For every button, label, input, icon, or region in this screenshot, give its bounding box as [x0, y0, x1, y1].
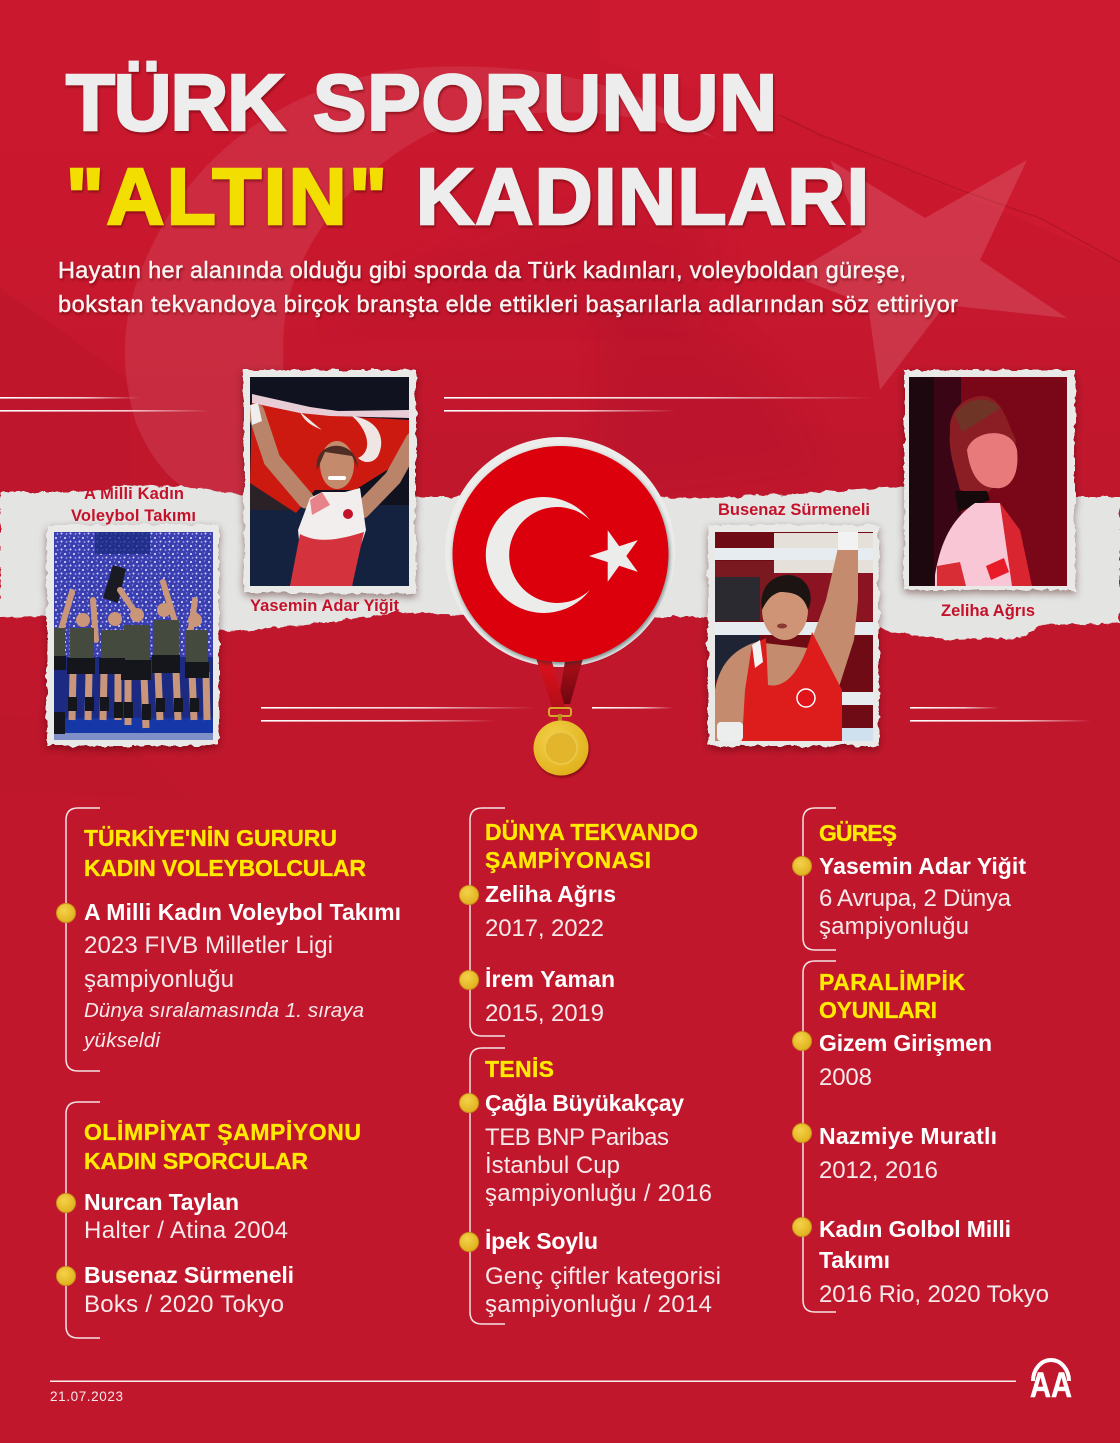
panel: Dünya Tekvando Şampiyonası: ŞAMPİYONASI [485, 847, 651, 873]
panel: Güreş: GÜREŞ [819, 820, 897, 846]
panel: Dünya Tekvando Şampiyonası [460, 808, 698, 1036]
panel: Paralimpik Oyunları: 2012, 2016 [819, 1157, 938, 1184]
panel: Türkiye'nin gururu: A Milli Kadın Voleybol Takımı [84, 899, 401, 925]
captions: Yasemin Adar Yiğit [250, 597, 400, 615]
title: SPORUNUN [313, 58, 777, 147]
panel: Olimpiyat şampiyonu: OLİMPİYAT ŞAMPİYONU [84, 1119, 361, 1145]
footer rule [50, 1380, 1016, 1382]
bullet [792, 1218, 812, 1236]
crescent [486, 497, 590, 613]
subtitle: Hayatın her alanında olduğu gibi sporda da Türk kadınları, voleyboldan güreşe, [58, 257, 906, 283]
panel: Olimpiyat şampiyonu: Busenaz Sürmeneli [84, 1262, 294, 1288]
panel: Paralimpik Oyunları: OYUNLARI [819, 997, 937, 1023]
panel: Türkiye'nin gururu [56, 808, 401, 1071]
title: "ALTIN" [66, 152, 387, 241]
panel: Türkiye'nin gururu: Dünya sıralamasında 1. sıraya [84, 999, 364, 1022]
panel: Tenis: TENİS [485, 1056, 554, 1082]
flag roundel and medal [445, 437, 675, 776]
panel: Olimpiyat şampiyonu: Nurcan Taylan [84, 1189, 239, 1215]
title [66, 58, 869, 241]
panel: Tenis [460, 1048, 721, 1324]
decorative rules [0, 397, 1091, 722]
photo: A Milli Kadın Voleybol Takımı [47, 525, 219, 746]
captions: Zeliha Ağrıs [941, 602, 1035, 620]
panel: Olimpiyat şampiyonu: Halter / Atina 2004 [84, 1217, 288, 1244]
panel: Tenis: şampiyonluğu / 2014 [485, 1291, 712, 1318]
ribbon [535, 655, 584, 710]
panel: Tenis: Çağla Büyükakçay [485, 1090, 684, 1116]
panel: Paralimpik Oyunları: Kadın Golbol Milli [819, 1216, 1011, 1242]
panel: Paralimpik Oyunları: Gizem Girişmen [819, 1030, 992, 1056]
panel: Dünya Tekvando Şampiyonası: 2015, 2019 [485, 1000, 604, 1027]
photo: Yasemin Adar Yiğit [244, 370, 416, 593]
bullet [460, 886, 478, 904]
bullet [792, 1032, 812, 1050]
title: TÜRK [66, 58, 285, 147]
panel: Paralimpik Oyunları: Nazmiye Muratlı [819, 1123, 997, 1149]
panel: Paralimpik Oyunları [792, 961, 1049, 1312]
bullet [56, 1194, 76, 1212]
subtitle [58, 257, 958, 317]
bullet [56, 904, 76, 922]
panel: Türkiye'nin gururu: TÜRKİYE'NİN GURURU [84, 825, 337, 851]
star [589, 530, 638, 582]
subtitle: bokstan tekvandoya birçok branşta elde ettikleri başarılarla adlarından söz ettiriyor [58, 291, 958, 317]
panel: Dünya Tekvando Şampiyonası: Zeliha Ağrıs [485, 881, 616, 907]
panel: Paralimpik Oyunları: 2016 Rio, 2020 Tokyo [819, 1281, 1049, 1308]
panel: Tenis: İpek Soylu [485, 1228, 598, 1254]
bail [549, 708, 571, 722]
date: 21.07.2023 [50, 1389, 123, 1404]
bullet [792, 856, 812, 876]
panel: Türkiye'nin gururu: KADIN VOLEYBOLCULAR [84, 855, 366, 881]
title: KADINLARI [416, 152, 869, 241]
bullet [56, 1266, 76, 1286]
panel: Dünya Tekvando Şampiyonası: 2017, 2022 [485, 915, 604, 942]
background: ghost crescent of the flag [125, 66, 715, 500]
bullet [460, 970, 478, 990]
bullet [460, 1094, 478, 1112]
bullet [460, 1232, 478, 1252]
panel: Paralimpik Oyunları: Takımı [819, 1247, 890, 1273]
icon: AA logo: AA [1030, 1366, 1072, 1405]
panel: Türkiye'nin gururu: 2023 FIVB Milletler Ligi [84, 932, 333, 959]
panel: Paralimpik Oyunları: 2008 [819, 1064, 872, 1091]
medal [534, 720, 588, 776]
panel: Tenis: Genç çiftler kategorisi [485, 1263, 721, 1290]
panel: Tenis: şampiyonluğu / 2016 [485, 1180, 712, 1207]
panel: Türkiye'nin gururu: şampiyonluğu [84, 966, 234, 993]
photo: Zeliha Ağrıs [904, 370, 1075, 590]
captions [71, 485, 1035, 620]
panel: Olimpiyat şampiyonu: Boks / 2020 Tokyo [84, 1291, 284, 1318]
panel: Güreş: Yasemin Adar Yiğit [819, 853, 1026, 879]
panel: Olimpiyat şampiyonu: KADIN SPORCULAR [84, 1148, 308, 1174]
panel: Türkiye'nin gururu: yükseldi [82, 1029, 161, 1052]
panel: Paralimpik Oyunları: PARALİMPİK [819, 969, 965, 995]
bullet [792, 1124, 812, 1142]
panel: Tenis: TEB BNP Paribas [485, 1124, 669, 1151]
captions: Voleybol Takımı [71, 507, 196, 525]
panel: Güreş: 6 Avrupa, 2 Dünya [819, 885, 1012, 912]
torn paper band [0, 485, 1120, 640]
panel: Dünya Tekvando Şampiyonası: DÜNYA TEKVANDO [485, 819, 698, 845]
photo: Busenaz Sürmeneli [708, 525, 879, 746]
captions: Busenaz Sürmeneli [718, 501, 870, 519]
panel: Güreş [792, 808, 1026, 950]
panel: Tenis: İstanbul Cup [485, 1152, 620, 1179]
panel: Dünya Tekvando Şampiyonası: İrem Yaman [485, 966, 615, 992]
captions: A Milli Kadın [84, 485, 184, 503]
panel: Olimpiyat şampiyonu [56, 1102, 361, 1338]
background: ghost star of the flag [790, 160, 1067, 390]
panel: Güreş: şampiyonluğu [819, 913, 969, 940]
